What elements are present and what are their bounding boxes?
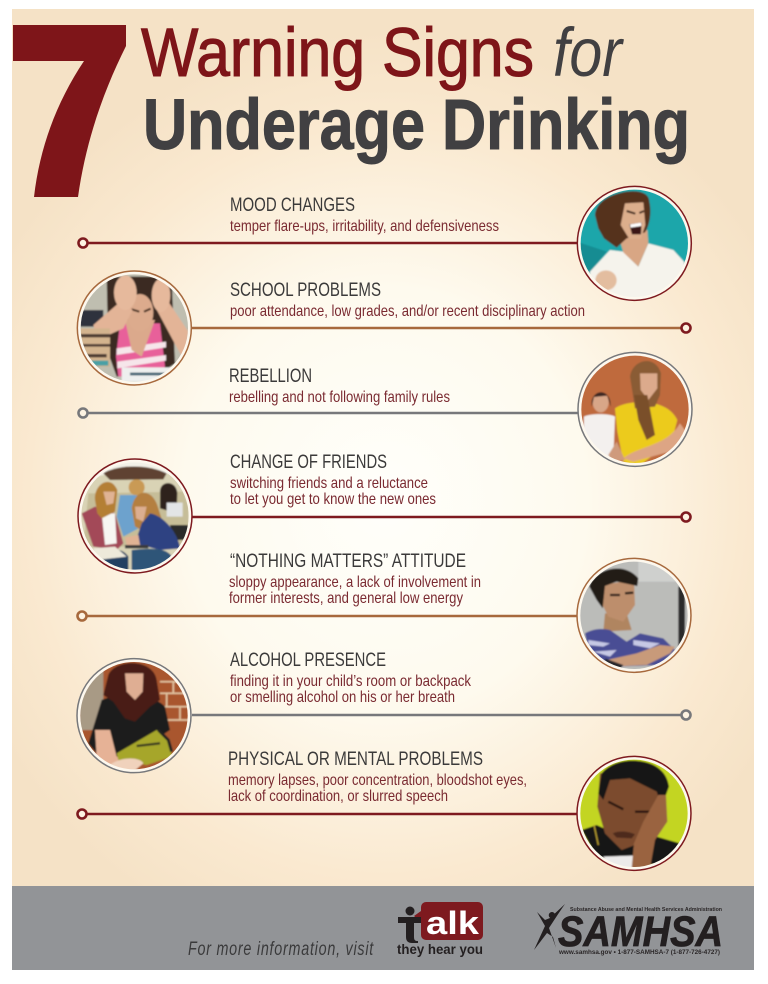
heading 2: SCHOOL PROBLEMS — [230, 280, 381, 301]
item 4: change of friends — [77, 452, 691, 577]
description 3: rebelling and not following family rules — [229, 389, 450, 406]
photo: mother and defiant daughter — [577, 352, 693, 472]
connector line 4 — [192, 512, 690, 522]
SAMHSA logo: SAMHSA — [558, 908, 723, 956]
description 4 — [230, 475, 436, 508]
title line 1: for — [553, 14, 625, 91]
description 5: former interests, and general low energy — [229, 590, 463, 607]
connector line 5 — [78, 612, 579, 620]
connector line 2 — [192, 324, 690, 332]
heading 4: CHANGE OF FRIENDS — [230, 452, 387, 473]
heading 3: REBELLION — [229, 366, 312, 387]
item 1: mood changes — [78, 185, 693, 302]
talk they hear you logo: alk — [426, 905, 479, 941]
SAMHSA figure icon — [534, 904, 565, 950]
photo: angry young man — [577, 185, 693, 302]
heading 6: ALCOHOL PRESENCE — [230, 650, 386, 671]
talk they hear you logo — [397, 902, 483, 957]
description 7: memory lapses, poor concentration, bloodshot eyes, — [228, 772, 527, 789]
SAMHSA logo: Substance Abuse and Mental Health Services Administration — [570, 907, 723, 913]
photo: tired young man resting head on hand — [577, 755, 693, 877]
item 7: physical or mental problems — [78, 749, 693, 877]
title line 2: Underage Drinking — [143, 86, 690, 165]
photo: young woman with backpack — [77, 657, 193, 777]
heading 7: PHYSICAL OR MENTAL PROBLEMS — [228, 749, 483, 770]
photo: group of students — [77, 459, 193, 577]
description 4: switching friends and a reluctance — [230, 475, 428, 492]
item 3: rebellion — [78, 352, 693, 472]
item 6: alcohol presence — [77, 650, 691, 777]
description 2: poor attendance, low grades, and/or recent disciplinary action — [230, 303, 585, 320]
footer band — [12, 886, 754, 970]
title — [141, 14, 690, 165]
description 4: to let you get to know the new ones — [230, 491, 436, 508]
big numeral 7 — [13, 25, 126, 197]
description 5: sloppy appearance, a lack of involvement in — [229, 574, 481, 591]
footer call to action: For more information, visit — [188, 939, 374, 960]
description 6: or smelling alcohol on his or her breath — [230, 689, 455, 706]
connector line 1 — [78, 238, 580, 248]
photo: girl with head in hands — [77, 270, 193, 387]
connector line 7 — [78, 810, 579, 818]
item 5: nothing matters attitude — [78, 551, 693, 677]
connector line 3 — [78, 408, 580, 418]
description 7 — [228, 772, 527, 805]
description 1: temper flare-ups, irritability, and defensiveness — [230, 218, 499, 235]
SAMHSA logo: www.samhsa.gov • 1-877-SAMHSA-7 (1-877-726-4727) — [558, 950, 720, 956]
item 2: school problems — [77, 270, 691, 387]
description 6: finding it in your child’s room or backpack — [230, 673, 472, 690]
talk they hear you logo: they hear you — [397, 941, 483, 957]
description 5 — [229, 574, 481, 607]
description 7: lack of coordination, or slurred speech — [228, 788, 448, 805]
title line 1: Warning Signs — [141, 14, 534, 91]
description 6 — [230, 673, 472, 706]
heading 1: MOOD CHANGES — [230, 195, 355, 216]
connector line 6 — [192, 710, 690, 720]
heading 5: “NOTHING MATTERS” ATTITUDE — [230, 551, 466, 572]
photo: disengaged teenage boy — [577, 557, 693, 677]
